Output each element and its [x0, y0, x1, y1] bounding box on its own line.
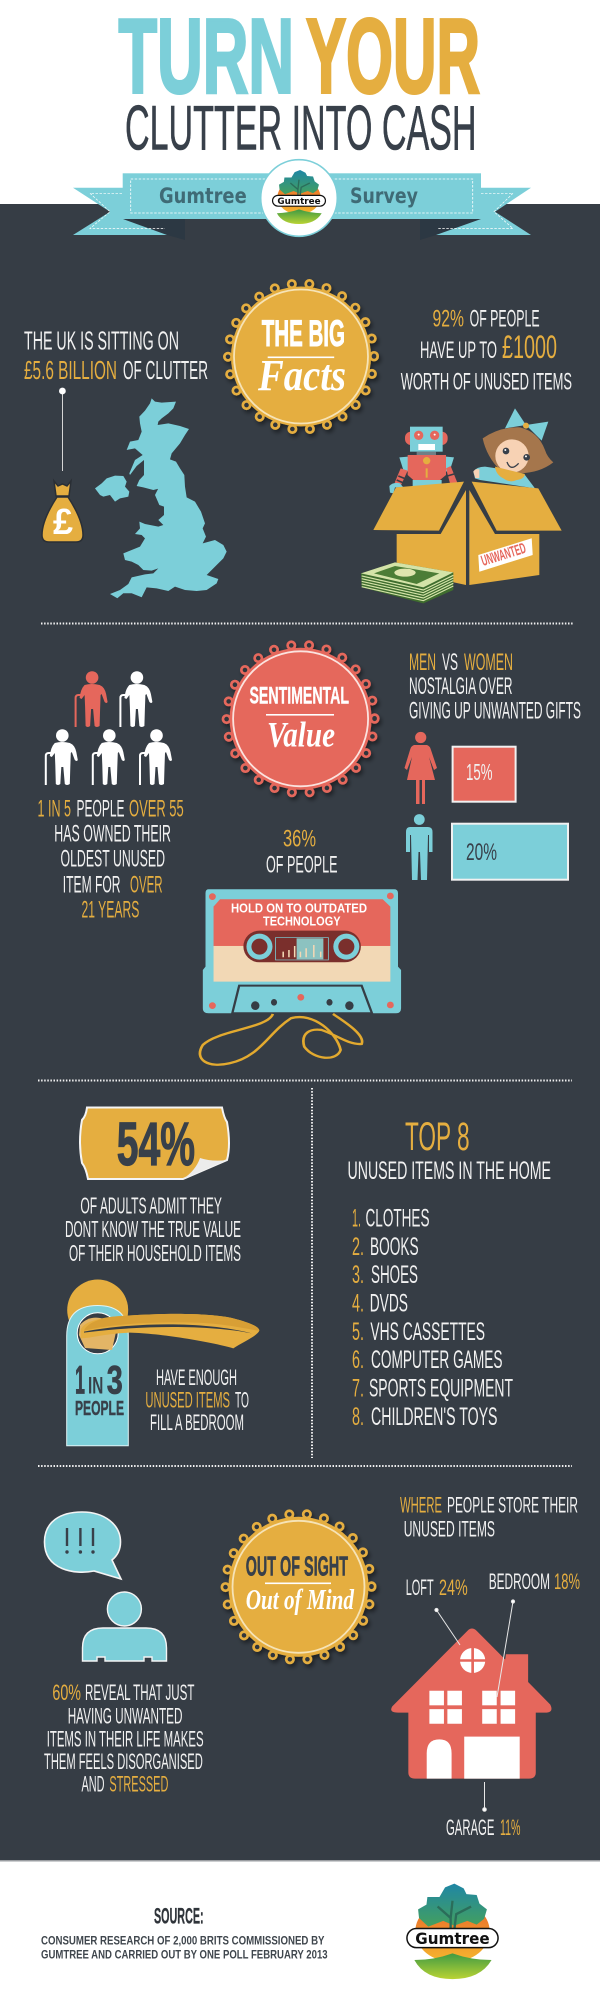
- list: top 8 items: DVDS: [370, 1290, 408, 1318]
- pin line: [59, 388, 66, 471]
- labels: loft and bedroom: 18%: [554, 1569, 580, 1594]
- icon: door hanger and handle: IN: [88, 1372, 103, 1399]
- logo: gumtree footer: Gumtree: [415, 1929, 490, 1948]
- bar: men 20 percent: [452, 824, 568, 880]
- icon: man: [406, 814, 432, 880]
- text: 60 percent reveal: STRESSED: [109, 1772, 168, 1796]
- list: top 8 items: [352, 1205, 513, 1431]
- source text: CONSUMER RESEARCH OF 2,000 BRITS COMMISSIONED BY: [41, 1934, 324, 1948]
- cash: [361, 562, 453, 603]
- icon: person: [82, 1592, 166, 1661]
- text: 1 in 5 people: 21 YEARS: [82, 896, 139, 923]
- list: top 8 items: CHILDREN'S TOYS: [371, 1403, 498, 1431]
- text: 92 percent of people: [401, 306, 572, 396]
- text: 60 percent reveal: ITEMS IN THEIR LIFE MAKES: [47, 1726, 204, 1751]
- ribbon banner: Survey: [350, 184, 418, 208]
- bar: men 20 percent: 20%: [466, 839, 497, 866]
- text: men vs women: MEN: [409, 649, 436, 676]
- source text: [41, 1904, 328, 1961]
- badge: out of sight out of mind: [226, 1514, 372, 1660]
- heading: top 8: TOP 8: [405, 1115, 470, 1159]
- ribbon banner: Gumtree: [159, 184, 247, 208]
- illustration: cassette: HOLD ON TO OUTDATED: [231, 902, 367, 916]
- divider dotted lower: [38, 1465, 572, 1467]
- title: TURN: [118, 0, 294, 116]
- map: united kingdom: [95, 398, 227, 598]
- badge: the big facts: Facts: [257, 351, 346, 400]
- text: uk clutter: THE UK IS SITTING ON: [24, 326, 179, 356]
- badge: the big facts: THE BIG: [262, 313, 345, 354]
- label: garage: GARAGE: [446, 1815, 494, 1840]
- doll: [473, 408, 553, 488]
- icon: door hanger and handle: 1: [75, 1358, 85, 1402]
- logo: gumtree in banner: Gumtree: [277, 196, 321, 207]
- text: adults admit: DONT KNOW THE TRUE VALUE: [65, 1216, 241, 1242]
- text: adults admit: OF THEIR HOUSEHOLD ITEMS: [69, 1240, 241, 1266]
- text: 36 percent of people: OF PEOPLE: [266, 851, 338, 878]
- icon: woman: [404, 732, 437, 804]
- text: 1 in 5 people: OVER 55: [129, 796, 184, 823]
- text: 1 in 5 people: OVER: [130, 872, 163, 899]
- labels: loft and bedroom: 24%: [439, 1575, 468, 1600]
- tag: 54 percent: 54%: [117, 1110, 195, 1178]
- text: 11%: [500, 1815, 520, 1840]
- icon: money bag: [42, 481, 83, 542]
- text: where people store: UNUSED ITEMS: [404, 1516, 495, 1541]
- list: top 8 items: 8.: [352, 1403, 364, 1431]
- badge: out of sight out of mind: OUT OF SIGHT: [246, 1550, 348, 1581]
- robot: [389, 427, 457, 493]
- bar: women 15 percent: 15%: [466, 759, 492, 785]
- badge: sentimental value: SENTIMENTAL: [250, 682, 349, 709]
- list: top 8 items: 1.: [352, 1205, 361, 1233]
- illustration: cassette: [200, 889, 401, 1065]
- icon: door hanger and handle: 3: [107, 1358, 123, 1402]
- text: 1 in 5 people: [38, 796, 184, 923]
- text: TO: [235, 1388, 249, 1413]
- list: top 8 items: 3.: [352, 1261, 364, 1289]
- icon: speech bubble: [44, 1512, 121, 1579]
- text: unused items bedroom: [145, 1365, 249, 1435]
- icon: money bag: £: [53, 501, 73, 542]
- text: 1 in 5 people: OLDEST UNUSED: [60, 846, 165, 873]
- divider dotted middle: [38, 1080, 572, 1082]
- text: 36 percent of people: [266, 826, 338, 878]
- labels: loft and bedroom: [406, 1569, 580, 1600]
- text: adults admit: OF ADULTS ADMIT THEY: [80, 1192, 222, 1218]
- badge: the big facts: [228, 284, 374, 430]
- text: 60 percent reveal: AND: [82, 1772, 104, 1796]
- badge: out of sight out of mind: Out of Mind: [246, 1585, 355, 1616]
- ribbon banner: [73, 160, 531, 240]
- divider dotted top: [41, 622, 574, 624]
- icons: five elderly people: [46, 671, 172, 785]
- list: top 8 items: VHS CASSETTES: [370, 1318, 485, 1346]
- label: unwanted: [478, 538, 533, 572]
- icon: door hanger and handle: [67, 1280, 259, 1446]
- text: adults admit: [65, 1192, 241, 1266]
- text: men vs women: VS: [442, 649, 458, 676]
- text: 1 in 5 people: 1 IN 5: [38, 796, 71, 823]
- list: top 8 items: CLOTHES: [366, 1205, 430, 1233]
- title: [118, 0, 480, 164]
- list: top 8 items: 6.: [352, 1346, 364, 1374]
- tag: 54 percent: [80, 1108, 229, 1179]
- text: unused items bedroom: UNUSED ITEMS: [145, 1388, 230, 1413]
- text: uk clutter: £5.6 BILLION: [24, 355, 117, 385]
- box: [373, 482, 562, 585]
- text: 1 in 5 people: ITEM FOR: [63, 872, 120, 899]
- text: 60 percent reveal: HAVING UNWANTED: [68, 1703, 182, 1728]
- badge: sentimental value: [227, 645, 375, 793]
- source text: SOURCE:: [154, 1904, 204, 1929]
- illustration: toy box: [361, 408, 562, 603]
- text: where people store: [400, 1492, 578, 1541]
- list: top 8 items: SHOES: [371, 1261, 418, 1289]
- badge: sentimental value: Value: [267, 715, 335, 755]
- text: 60 percent reveal: 60%: [52, 1680, 81, 1705]
- text: 1 in 5 people: PEOPLE: [76, 796, 124, 823]
- text: uk clutter: OF CLUTTER: [123, 355, 208, 385]
- bar: women 15 percent: [453, 747, 516, 802]
- text: uk clutter: [24, 326, 208, 385]
- text: 60 percent reveal: THEM FEELS DISORGANISED: [44, 1749, 203, 1774]
- list: top 8 items: 2.: [352, 1233, 364, 1261]
- illustration: house: [391, 1629, 551, 1779]
- illustration: cassette: TECHNOLOGY: [263, 915, 341, 929]
- text: men vs women: [409, 649, 581, 725]
- text: 60 percent reveal: REVEAL THAT JUST: [85, 1680, 194, 1705]
- text: 60 percent reveal: [44, 1680, 204, 1796]
- list: top 8 items: 5.: [352, 1318, 364, 1346]
- labels: loft and bedroom: LOFT: [406, 1575, 434, 1600]
- list: top 8 items: 4.: [352, 1290, 364, 1318]
- logo: gumtree footer: [407, 1884, 498, 1979]
- text: 92 percent of people: 92%: [432, 306, 464, 333]
- list: top 8 items: 7.: [352, 1375, 364, 1403]
- text: 92 percent of people: HAVE UP TO: [420, 337, 497, 364]
- label: unwanted: UNWANTED: [479, 540, 528, 570]
- icon: door hanger and handle: PEOPLE: [75, 1398, 124, 1420]
- text: 36 percent of people: 36%: [283, 826, 316, 853]
- heading: top 8: [348, 1115, 551, 1185]
- text: unused items bedroom: FILL A BEDROOM: [150, 1410, 244, 1435]
- labels: loft and bedroom: BEDROOM: [489, 1569, 550, 1594]
- text: 92 percent of people: £1000: [502, 329, 557, 365]
- text: where people store: WHERE: [400, 1492, 442, 1517]
- text: men vs women: WOMEN: [464, 649, 513, 676]
- logo: gumtree in banner: [273, 170, 325, 224]
- text: 1 in 5 people: HAS OWNED THEIR: [54, 821, 171, 848]
- list: top 8 items: BOOKS: [370, 1233, 419, 1261]
- source text: GUMTREE AND CARRIED OUT BY ONE POLL FEBRUARY 2013: [41, 1947, 328, 1961]
- text: unused items bedroom: HAVE ENOUGH: [156, 1365, 237, 1390]
- callout lines: [435, 1600, 515, 1811]
